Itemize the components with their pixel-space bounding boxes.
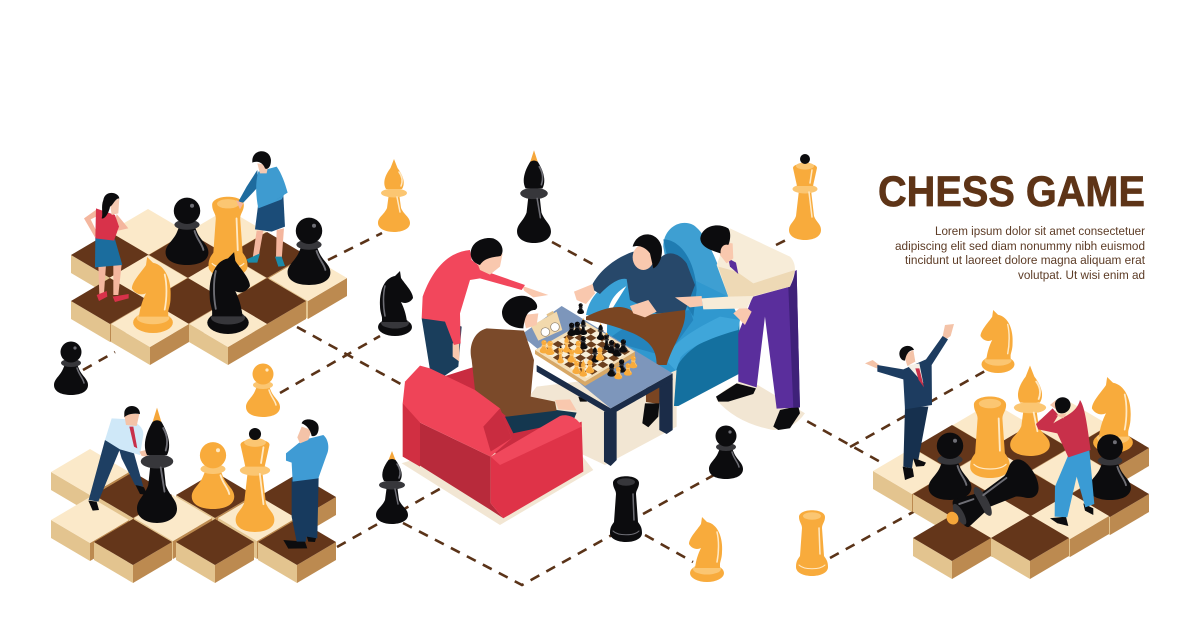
icon: black bishop top [517,150,551,243]
man in red shirt standing [422,238,548,377]
description text [895,224,1146,282]
chess board with pieces [535,318,637,386]
red armchair [403,366,583,518]
man in suit cheering [865,324,954,480]
standing man shadow [717,378,805,430]
panel: central scene, players at the table [402,223,805,525]
man in red sweater despairing [1036,397,1094,526]
icon: gold knight bottom [689,517,724,582]
panel: bottom-left chessboard [51,406,336,583]
title: CHESS GAME [878,168,1145,216]
icon: gold queen top [789,154,821,240]
woman in red top [84,193,129,302]
chess clock [531,311,562,341]
man in cream sweater pointing [675,225,800,430]
icon: gold bishop [378,159,410,232]
dashed connector lines [83,233,985,585]
icon: gold pawn [246,364,280,417]
man in blue shirt thinking [283,419,328,549]
description text: Lorem ipsum dolor sit amet consectetuer [935,224,1145,238]
description text: adipiscing elit sed diam nonummy nibh euismod [895,239,1145,253]
icon: black rook [610,476,642,542]
icon: gold knight right [981,310,1014,373]
blue armchair [586,223,740,406]
isolated chess pieces [54,150,1014,582]
icon: black pawn bottom [709,426,743,479]
panel: right chessboard [865,324,1149,579]
icon: gold rook bottom [796,510,828,576]
icon: black pawn left [54,342,88,395]
man in brown jacket sitting [471,296,577,433]
description text: volutpat. Ut wisi enim ad [1018,268,1145,282]
man in navy sweater [574,234,695,427]
man in shirt and tie pushing bishop [88,406,148,511]
fallen black queen [937,455,1044,539]
panel: top-left chessboard [71,151,347,365]
icon: black bishop bottom [376,451,408,524]
red armchair seat [443,367,560,463]
coffee table [521,306,673,466]
woman in blue blouse [236,151,288,267]
icon: black knight [378,271,413,336]
floor rug [402,367,737,525]
description text: tincidunt ut laoreet dolore magna aliquam erat [905,253,1146,267]
